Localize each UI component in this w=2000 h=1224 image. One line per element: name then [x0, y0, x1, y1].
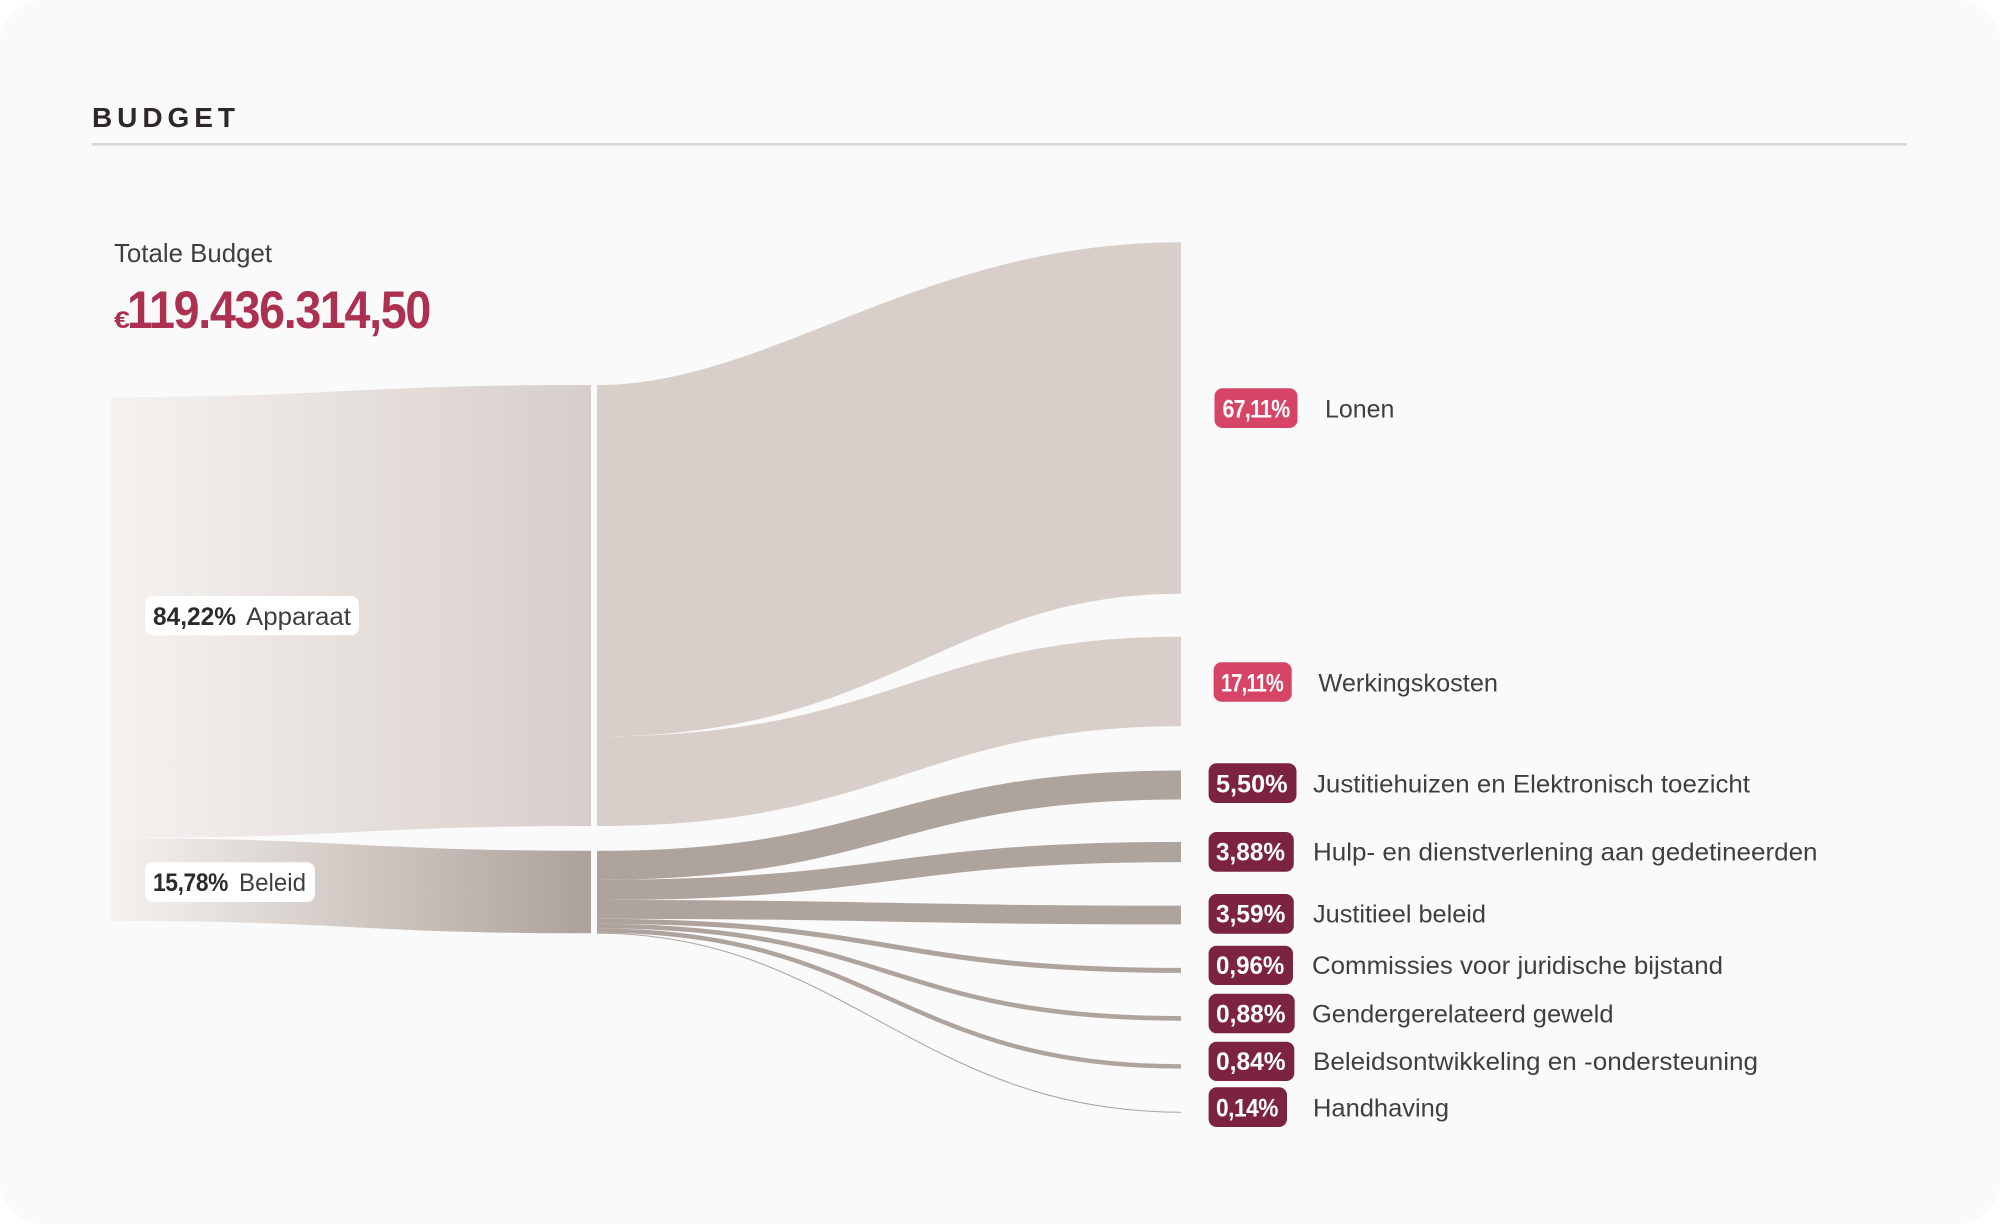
label: Beleid [145, 862, 315, 902]
row: Hulp- en dienstverlening aan gedetineerden: Hulp- en dienstverlening aan gedetineerden [1313, 839, 1818, 867]
row: Justitieel beleid: Justitieel beleid [1313, 901, 1486, 929]
flow: Commissies [597, 921, 1181, 970]
row: Lonen: Lonen [1325, 396, 1394, 424]
total budget block [114, 238, 430, 340]
row: Lonen: 67,11% [1222, 396, 1290, 424]
flow: Justitiehuizen [597, 785, 1181, 865]
total budget amount: 119.436.314,50 [127, 281, 430, 340]
row: Commissies voor juridische bijstand: 0,96% [1216, 952, 1284, 980]
row: Handhaving: Handhaving [1313, 1094, 1449, 1122]
flow: Hulp- en dienstverlening [597, 852, 1181, 890]
row: Justitieel beleid: 3,59% [1216, 901, 1285, 929]
row: Gendergerelateerd geweld [1209, 994, 1614, 1033]
row: Beleidsontwikkeling en -ondersteuning [1209, 1042, 1758, 1081]
sankey chart [111, 242, 1181, 1112]
row: Gendergerelateerd geweld: 0,88% [1216, 1000, 1286, 1028]
row: Werkingskosten: Werkingskosten [1318, 670, 1498, 698]
label: Beleid: 15,78% [153, 869, 228, 897]
title: BUDGET [92, 102, 235, 133]
row: Werkingskosten: 17,11% [1221, 670, 1284, 698]
row: Gendergerelateerd geweld: Gendergerelateerd geweld [1312, 1000, 1614, 1028]
flow: Beleid [111, 880, 591, 892]
row: Commissies voor juridische bijstand: Commissies voor juridische bijstand [1312, 952, 1723, 980]
label: Apparaat [145, 596, 359, 635]
row: Beleidsontwikkeling en -ondersteuning: Beleidsontwikkeling en -ondersteuning [1313, 1048, 1758, 1076]
row: Werkingskosten [1214, 662, 1498, 702]
row: Beleidsontwikkeling en -ondersteuning: 0,84% [1216, 1048, 1286, 1076]
row: Hulp- en dienstverlening aan gedetineerden [1209, 832, 1818, 872]
flow: Werkingskosten [597, 637, 1181, 826]
row: Justitieel beleid [1209, 894, 1486, 934]
total budget label: Totale Budget [114, 238, 273, 268]
row: Hulp- en dienstverlening aan gedetineerden: 3,88% [1216, 839, 1285, 867]
flow: Beleidsontwikkeling [597, 931, 1181, 1066]
row: Justitiehuizen en Elektronisch toezicht: Justitiehuizen en Elektronisch toezicht [1313, 770, 1750, 798]
total budget amount: € [114, 307, 130, 334]
flow: Apparaat [111, 606, 591, 618]
row: Justitiehuizen en Elektronisch toezicht [1209, 763, 1750, 803]
flow: Lonen [597, 242, 1181, 737]
row: Justitiehuizen en Elektronisch toezicht: 5,50% [1216, 770, 1288, 798]
row: Lonen [1214, 388, 1394, 428]
flow: Justitieel beleid [597, 909, 1181, 915]
label: Apparaat: 84,22% [153, 603, 236, 631]
row: Commissies voor juridische bijstand [1209, 946, 1723, 985]
label: Beleid: Beleid [239, 869, 306, 897]
flow: Gendergerelateerd geweld [597, 926, 1181, 1018]
row: Handhaving: 0,14% [1216, 1094, 1278, 1122]
label: Apparaat: Apparaat [246, 603, 351, 631]
flow: Handhaving [597, 933, 1181, 1112]
row: Handhaving [1209, 1087, 1449, 1127]
